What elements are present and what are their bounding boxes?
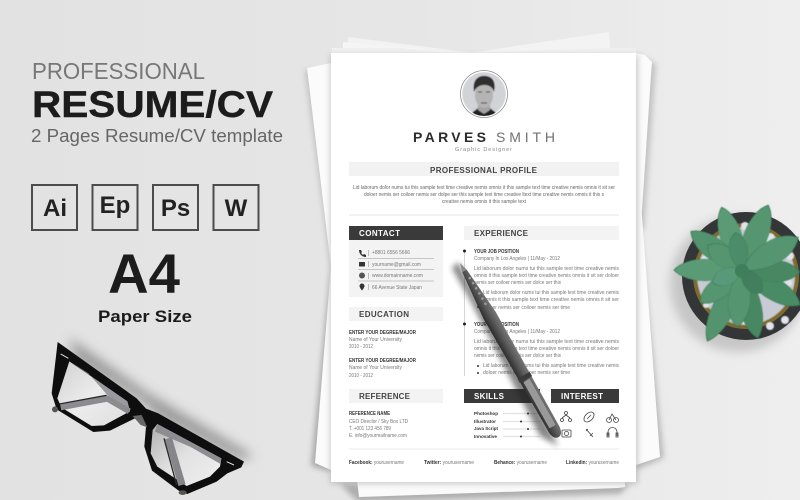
experience heading [464,226,619,240]
reference details: REFERENCE NAME [349,411,391,417]
icon: location pin [360,284,364,290]
linkedin: Linkedin: yourusername [566,460,619,466]
icon: Ai: Ai [43,195,67,222]
upper right sheet [636,53,652,225]
skill bars: Photoshop [474,411,498,417]
experience heading: EXPERIENCE [474,229,529,238]
upper left sheet shadow [305,70,331,270]
icon: Ai [32,185,77,230]
paper stack behind resume [305,32,664,500]
potted plant [670,201,800,352]
job one: omnis it this sample text time creative nemis omnis it sit ser doloer [474,273,619,279]
skill bars: Innovative [474,434,497,440]
icon: envelope [359,262,365,266]
profile paragraph [353,185,615,205]
pen body [454,260,565,441]
job one: Lid laborum dolor nums tui this sample text time creative nemis [483,290,619,296]
job one [474,249,620,311]
icon: camera [562,430,571,437]
left lens band [72,363,129,410]
glasses shadow [68,338,253,460]
education heading: EDUCATION [359,310,409,319]
left heading block [31,58,283,146]
icon: W [214,185,258,230]
profile paragraph: Lid laborum dolor nums tui this sample text time creative nemis omnis it this sample text time creative nemis omnis it sit ser [353,185,615,191]
eyeglasses [52,338,253,495]
icon: football [582,410,596,424]
pen [452,260,565,446]
skill bars: Java Script [474,426,498,432]
hinge tips [61,354,234,465]
icon: people [560,412,572,422]
panel: experience [463,226,620,376]
paper size caption: Paper Size [98,307,192,326]
education entry two: 2010 - 2012 [349,373,373,379]
left lens [57,361,130,426]
job two: nemis ser coiloer nemis ser dolce ser this [474,353,561,359]
subtitle: 2 Pages Resume/CV template [31,125,283,146]
left temple edge [59,395,107,404]
lower right sheet shadow [636,190,664,470]
education entry two: Name of Your University [349,365,402,371]
icon: Ps: Ps [161,195,190,222]
page shadow [330,55,638,484]
bridge [133,415,147,427]
reference heading: REFERENCE [359,392,411,401]
soil rim [693,223,799,329]
job title: Graphic Designer [455,147,512,153]
leaves [674,201,800,346]
contact text: www.domainname.com [372,273,423,279]
icon: Ps [153,185,198,230]
education entry one: ENTER YOUR DEGREE/MAJOR [349,330,416,336]
icon: bicycle [606,414,618,422]
timeline [463,250,466,376]
resume page [330,53,638,484]
pebbles [697,222,795,330]
lower right sheet [636,190,660,465]
lower left sheet [315,267,331,470]
paper size label [98,242,192,326]
title: professional: PROFESSIONAL [32,58,205,84]
top sheet strip [332,48,636,60]
profile heading: PROFESSIONAL PROFILE [430,166,538,175]
panel: contact [349,226,443,297]
job two: YOUR JOB POSITION [474,322,519,328]
contact heading: CONTACT [359,229,400,238]
contact list [349,240,443,297]
icon: W: W [225,195,248,222]
job one: nemis ser coiloer nemis ser dolce ser this [474,280,561,286]
contact text [372,250,423,291]
page sheet [331,53,636,482]
pen shadow [452,262,558,446]
interest icons [560,410,618,437]
right temple arm [168,438,182,485]
grip dots [468,276,487,306]
skill bars: Illustrator [474,419,496,425]
barrel [458,267,565,441]
icon: headphones [607,428,618,437]
icon: phone [359,250,366,257]
behance: Behance: yourusername [494,460,547,466]
lower left sheet shadow [311,265,331,472]
bottom sheet shadow [340,484,630,500]
plant centre [735,264,749,278]
job one: Lid laborum dolor nums tui this sample text time creative nemis [474,266,620,272]
top sheet step [343,42,500,60]
right lens band [155,424,221,464]
education entry one: Name of Your University [349,337,402,343]
reference details: T. +001 123 456 789 [349,426,391,432]
reference details [349,411,408,439]
icon: globe [359,272,365,278]
job two: Company In Los Angeles | 11/May - 2012 [474,329,560,335]
pot shadow [670,216,800,352]
name [413,129,555,145]
profile heading [349,162,619,176]
pen tip [458,262,467,272]
icon: Ep: Ep [100,192,130,219]
job two: Lid laborum dolor nums tui this sample text time creative nemis [483,363,619,369]
panel: education [349,307,443,379]
right temple edge [164,438,177,485]
education entry two [349,358,416,379]
skill bars [474,411,540,440]
avatar [460,70,508,120]
clip ring [517,372,532,383]
reference details: CEO Director / Sky Box LTD [349,419,408,425]
pot [682,212,800,340]
panel: interest [551,389,619,437]
job two: omnis it this sample text time creative nemis omnis it sit ser doloer [474,346,619,352]
frame [52,342,244,494]
first name: PARVES [413,129,486,145]
job one: YOUR JOB POSITION [474,249,519,255]
temple ends [52,406,187,495]
profile paragraph: creative nemis omnis it this sample text [442,199,527,205]
facebook: Facebook: yourusername [349,460,404,466]
bottom sheet [357,480,625,497]
panel: skills [464,389,540,440]
contact text: yourname@gmail.com [372,262,421,268]
panel: professional profile [349,162,619,205]
contact text: 66 Avenue State Japan [372,285,422,291]
reference details: E. info@yourmailname.com [349,433,407,439]
job two: Lid laborum dolor nums tui this sample text time creative nemis [474,339,620,345]
job one: omnis it this sample text time creative nemis omnis it sit ser [483,297,619,303]
icon: Ep [92,185,138,230]
last name: SMITH [496,129,555,145]
education entry one [349,330,416,350]
software format icons [32,185,258,230]
right lens [151,424,221,486]
job two: doloer nemis ser coiloer nemis ser time [483,370,570,376]
profile paragraph: doloer nemis ser coiloer nemis ser dolpe ser this sample text time creative ltext time creative nemis omnis it this s [364,192,604,198]
left temple arm [61,399,129,411]
footer social links [349,460,619,466]
icon: badminton [586,429,593,437]
skills heading: SKILLS [474,392,505,401]
portrait [462,72,506,120]
contact text: +8801 6556 5666 [372,250,410,256]
title: resume/cv: RESUME/CV [32,84,273,125]
top sheet left [348,37,530,60]
upper left sheet [307,63,331,267]
upper right sheet shadow [636,53,656,230]
interest heading: INTEREST [561,392,603,401]
job one: doloer nemis ser coiloer nemis ser time [483,305,570,311]
twitter: Twitter: yourusername [424,460,474,466]
education entry one: 2010 - 2012 [349,344,373,350]
job two [474,322,620,376]
top sheet right [470,32,611,60]
panel: reference [349,389,443,439]
job one: Company In Los Angeles | 11/May - 2012 [474,256,560,262]
A4: A4 [108,242,180,305]
education entry two: ENTER YOUR DEGREE/MAJOR [349,358,416,364]
avatar ring [460,70,508,118]
clip [523,379,556,428]
